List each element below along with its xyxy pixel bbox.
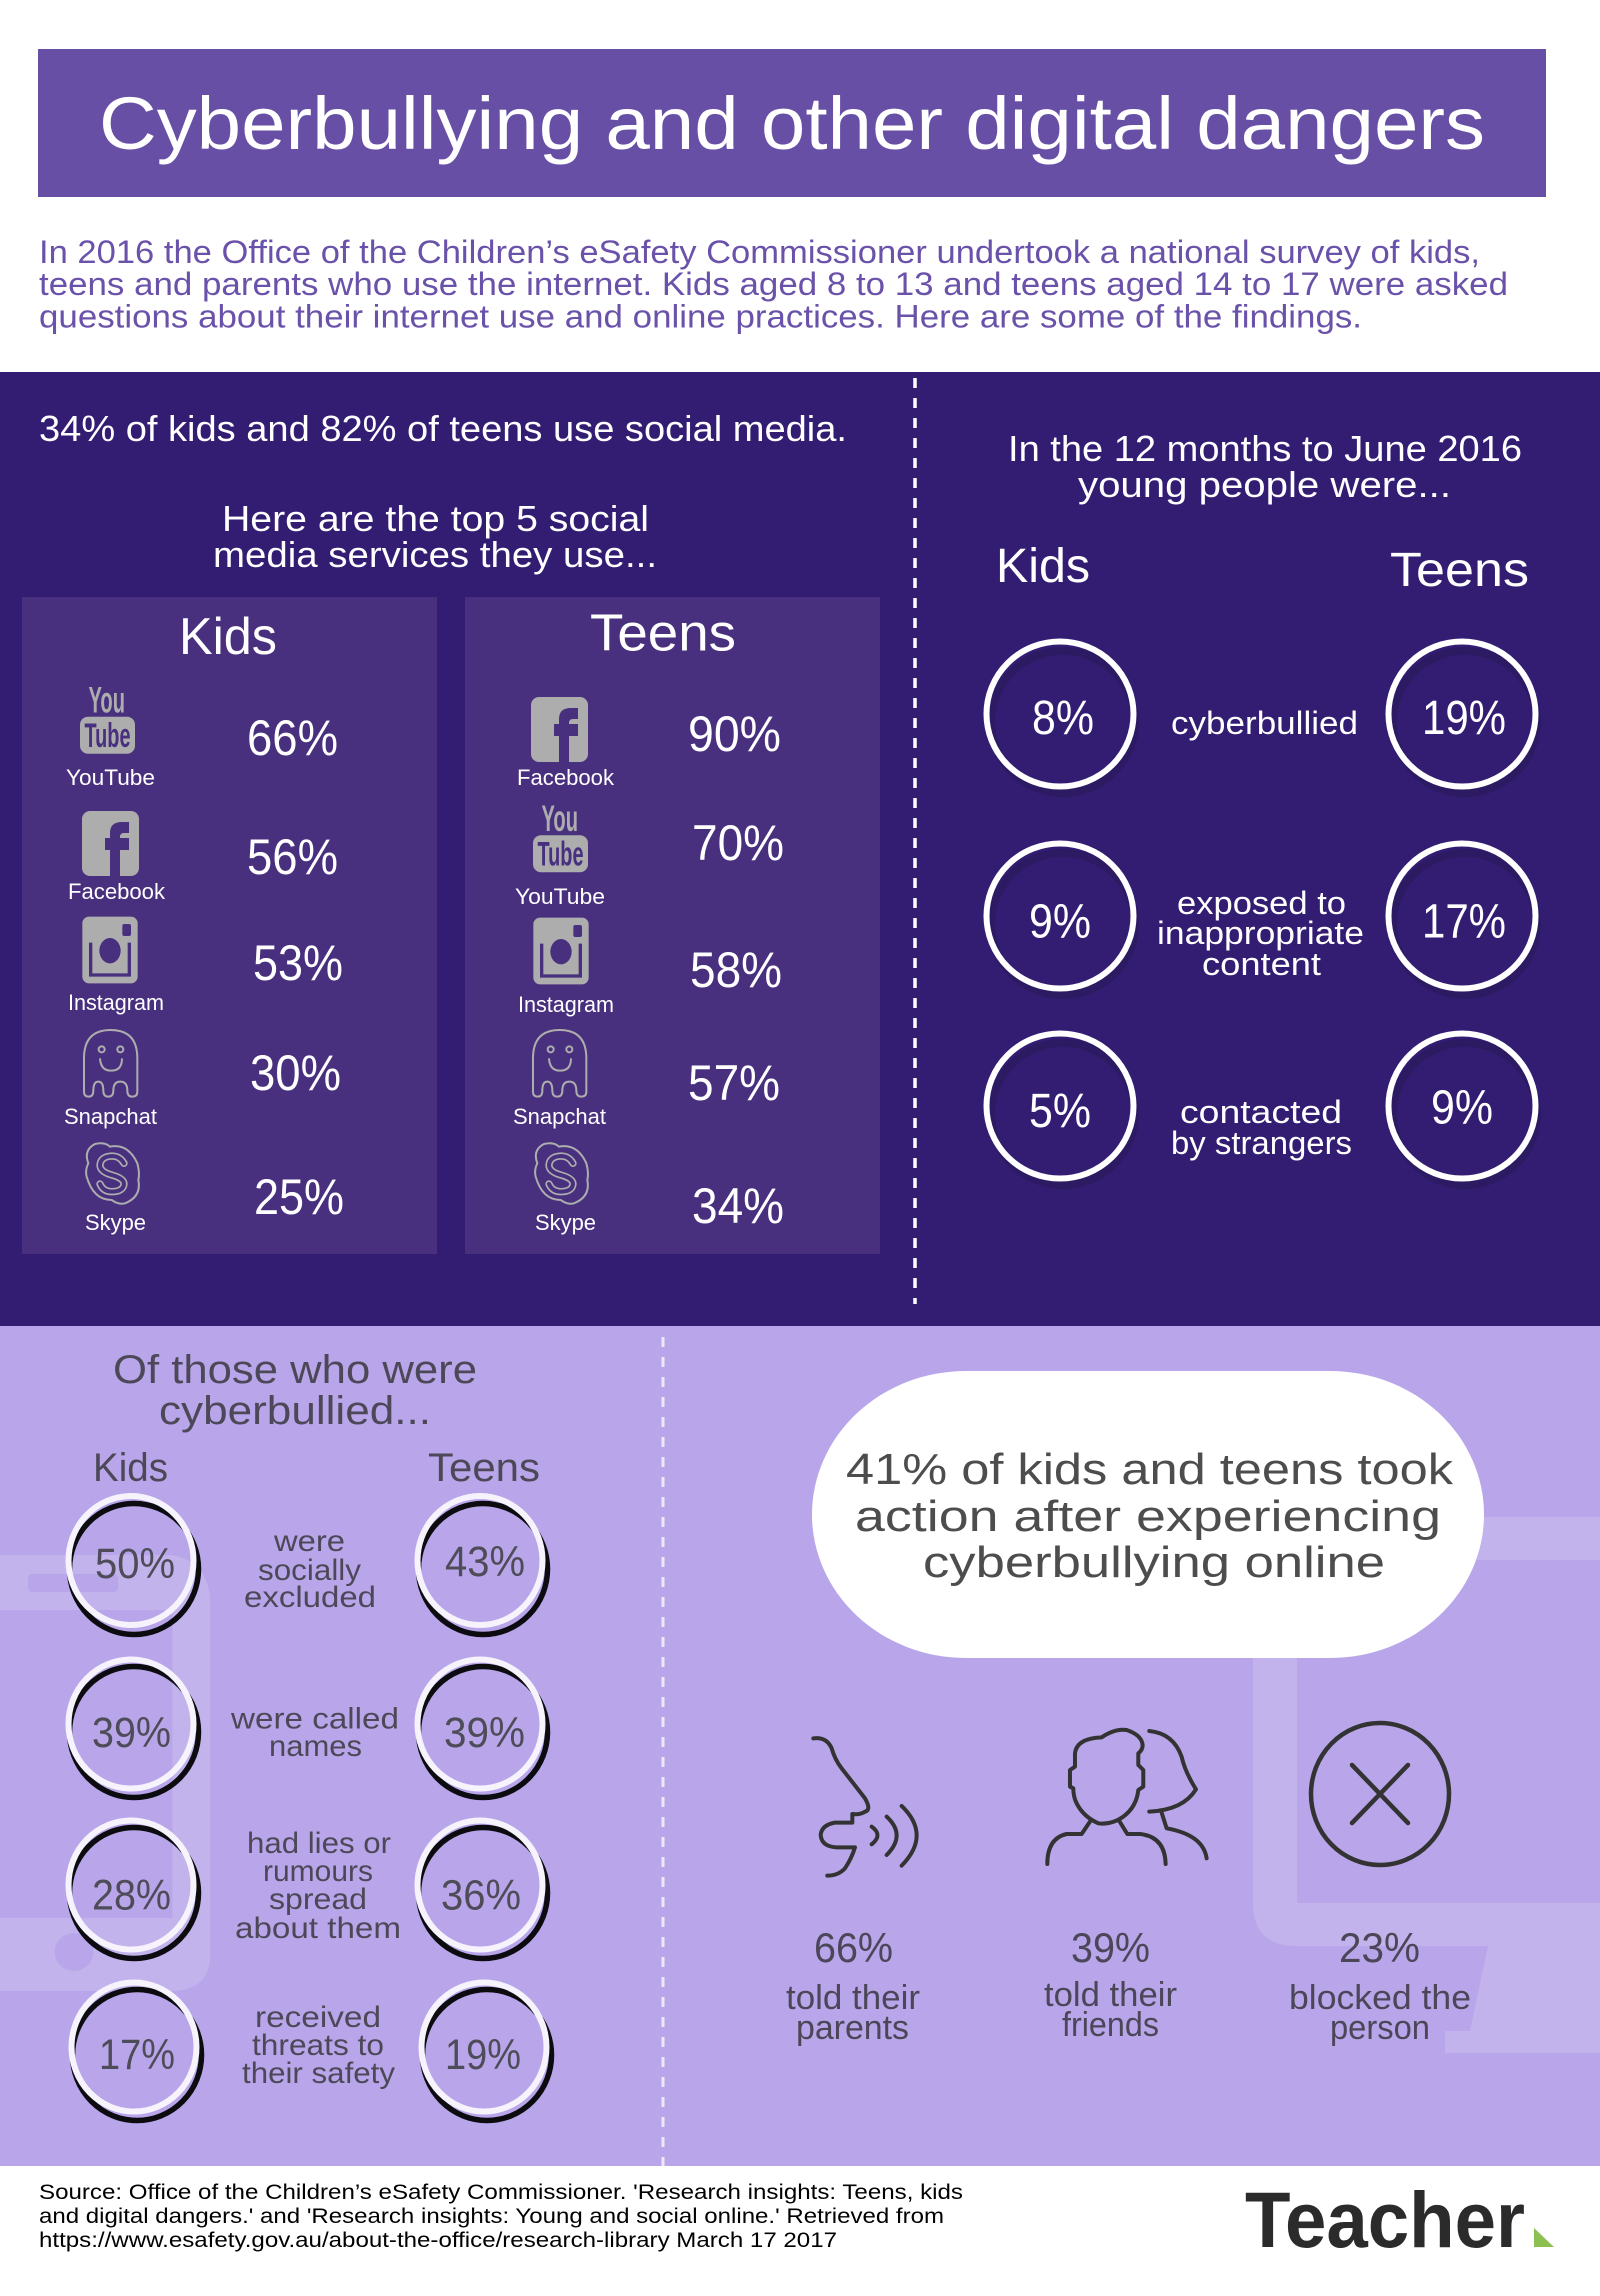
ring: kids socially excluded 50%: 50% bbox=[95, 1540, 175, 1588]
panel: lavender cyberbullied section bbox=[0, 1326, 1600, 2166]
callout bubble: 41% took action: 41% of kids and teens took bbox=[846, 1445, 1454, 1494]
panel: kids top services bbox=[22, 597, 437, 1254]
background icon: computer monitor bbox=[1253, 1517, 1600, 2053]
ring: teens threats 19% bbox=[422, 1982, 552, 2120]
label: Snapchat: Snapchat bbox=[64, 1104, 157, 1129]
ring label: socially excluded: excluded bbox=[244, 1581, 376, 1614]
ring: teens rumours 36% bbox=[418, 1820, 548, 1958]
label: Snapchat: Snapchat bbox=[513, 1104, 606, 1129]
icon: YouTube: You bbox=[88, 680, 125, 721]
ring label: socially excluded bbox=[244, 1525, 376, 1614]
stat circle: teens inappropriate content 17% bbox=[1388, 844, 1537, 995]
value: Snapchat kids: 30% bbox=[250, 1045, 341, 1101]
column heading: kids: Kids bbox=[996, 540, 1090, 593]
ring label: called names: were called bbox=[230, 1702, 399, 1736]
icon: YouTube: Tube bbox=[84, 717, 130, 755]
panel: dark social media and exposure section bbox=[0, 372, 1600, 1326]
label: Instagram: Instagram bbox=[68, 990, 164, 1015]
top 5 heading: Here are the top 5 social bbox=[222, 498, 649, 539]
label: Skype: Skype bbox=[85, 1210, 146, 1235]
ring: kids threats 17% bbox=[72, 1982, 202, 2120]
intro paragraph bbox=[39, 234, 1508, 334]
ring label: threats to safety bbox=[242, 2001, 395, 2090]
column heading: kids: Kids bbox=[93, 1446, 168, 1490]
value: Facebook kids: 56% bbox=[247, 829, 338, 885]
intro paragraph: teens and parents who use the internet. Kids aged 8 to 13 and teens aged 14 to 17 were asked bbox=[39, 266, 1508, 302]
ring label: called names: names bbox=[269, 1730, 362, 1763]
ring: kids called names 39%: 39% bbox=[92, 1709, 171, 1757]
label: Skype: Skype bbox=[535, 1210, 596, 1235]
value: YouTube teens: 70% bbox=[692, 815, 784, 871]
stat circle: teens contacted by strangers 9%: 9% bbox=[1431, 1082, 1493, 1134]
stat circle: kids inappropriate content 9%: 9% bbox=[1029, 896, 1091, 948]
stat label: cyberbullied: cyberbullied bbox=[1171, 705, 1358, 741]
icon: YouTube: You bbox=[542, 798, 578, 839]
value: Instagram teens: 58% bbox=[690, 942, 782, 998]
label: YouTube: YouTube bbox=[66, 765, 155, 790]
ring label: lies or rumours bbox=[235, 1827, 401, 1945]
ring label: called names bbox=[230, 1702, 399, 1763]
ring label: lies or rumours: had lies or bbox=[247, 1827, 391, 1860]
action stat: blocked person bbox=[1289, 1924, 1471, 2047]
stat label: exposed to inappropriate content: inappropriate bbox=[1157, 915, 1364, 951]
callout bubble: 41% took action: action after experiencing bbox=[855, 1492, 1441, 1541]
icon: Facebook bbox=[82, 811, 139, 876]
icon: YouTube: Tube bbox=[538, 836, 584, 874]
ring: kids rumours 28% bbox=[68, 1820, 198, 1958]
label: Instagram: Instagram bbox=[518, 992, 614, 1017]
action stat: blocked person: person bbox=[1330, 2009, 1430, 2047]
ring: teens threats 19%: 19% bbox=[445, 2031, 521, 2079]
stat circle: teens contacted by strangers 9% bbox=[1388, 1034, 1537, 1185]
value: Facebook teens: 90% bbox=[688, 706, 781, 762]
label: Facebook: Facebook bbox=[68, 879, 166, 904]
icon: Snapchat bbox=[533, 1030, 586, 1097]
heading: twelve months: young people were... bbox=[1078, 464, 1451, 505]
icon: YouTube bbox=[533, 798, 588, 874]
stat circle: kids contacted by strangers 5% bbox=[986, 1034, 1135, 1185]
background icon: phone bbox=[0, 1555, 210, 1991]
callout bubble: 41% took action bbox=[812, 1371, 1484, 1658]
icon: two people bbox=[1047, 1730, 1207, 1864]
stat circle: kids cyberbullied 8% bbox=[986, 642, 1135, 793]
stat label: exposed to inappropriate content bbox=[1157, 885, 1364, 982]
heading: of those cyberbullied bbox=[113, 1348, 477, 1433]
action stat: told parents: 66% bbox=[814, 1924, 893, 1971]
ring: kids socially excluded 50% bbox=[68, 1496, 198, 1634]
kids panel heading: Kids bbox=[179, 608, 277, 666]
teens panel heading: Teens bbox=[590, 604, 736, 662]
column heading: teens: Teens bbox=[1390, 544, 1529, 597]
source footer: https://www.esafety.gov.au/about-the-office/research-library March 17 2017 bbox=[39, 2229, 837, 2252]
icon: YouTube bbox=[80, 680, 135, 755]
ring label: lies or rumours: spread bbox=[269, 1883, 367, 1916]
stat label: exposed to inappropriate content: content bbox=[1202, 946, 1321, 982]
action stat: blocked person: blocked the bbox=[1289, 1979, 1471, 2017]
icon: Facebook bbox=[531, 697, 588, 762]
action stat: told parents: told their bbox=[786, 1979, 920, 2017]
stat label: contacted by strangers bbox=[1171, 1094, 1352, 1161]
ring: kids rumours 28%: 28% bbox=[92, 1872, 171, 1920]
ring: kids threats 17%: 17% bbox=[99, 2031, 175, 2079]
stat circle: teens cyberbullied 19% bbox=[1388, 642, 1537, 793]
title banner: Cyberbullying and other digital dangers bbox=[99, 82, 1485, 165]
top 5 heading bbox=[213, 498, 657, 575]
action stat: told friends bbox=[1044, 1924, 1177, 2044]
value: Skype kids: 25% bbox=[254, 1169, 344, 1225]
ring: teens socially excluded 43% bbox=[418, 1496, 548, 1634]
heading: twelve months bbox=[1008, 428, 1522, 505]
stat circle: teens inappropriate content 17%: 17% bbox=[1422, 896, 1506, 948]
stat label: contacted by strangers: contacted bbox=[1180, 1094, 1342, 1130]
source footer: and digital dangers.' and 'Research insights: Young and social online.' Retrieved from bbox=[39, 2205, 944, 2228]
ring: teens called names 39%: 39% bbox=[444, 1709, 525, 1757]
stat label: exposed to inappropriate content: exposed to bbox=[1177, 885, 1346, 921]
source footer bbox=[39, 2181, 963, 2252]
panel: teens top services bbox=[465, 597, 880, 1254]
action stat: told parents: parents bbox=[796, 2009, 909, 2047]
value: Instagram kids: 53% bbox=[253, 935, 343, 991]
heading: of those cyberbullied: cyberbullied... bbox=[159, 1389, 431, 1433]
icon: Instagram bbox=[82, 917, 138, 983]
action stat: told friends: 39% bbox=[1071, 1924, 1150, 1971]
icon: Snapchat bbox=[84, 1030, 137, 1097]
stat circle: kids contacted by strangers 5%: 5% bbox=[1029, 1085, 1091, 1138]
stat label: contacted by strangers: by strangers bbox=[1171, 1125, 1352, 1161]
heading: twelve months: In the 12 months to June 2016 bbox=[1008, 428, 1522, 469]
intro paragraph: questions about their internet use and online practices. Here are some of the findings. bbox=[39, 298, 1362, 334]
source footer: Source: Office of the Children’s eSafety Commissioner. 'Research insights: Teens, kids bbox=[39, 2181, 963, 2204]
ring label: threats to safety: received bbox=[255, 2001, 381, 2034]
value: Skype teens: 34% bbox=[692, 1178, 784, 1234]
ring: teens socially excluded 43%: 43% bbox=[445, 1538, 525, 1586]
ring label: threats to safety: threats to bbox=[252, 2029, 384, 2062]
ring: teens called names 39% bbox=[418, 1660, 548, 1798]
icon: Instagram bbox=[533, 918, 589, 984]
ring label: socially excluded: were bbox=[273, 1525, 345, 1558]
social media usage statement: 34% of kids and 82% of teens use social media. bbox=[39, 408, 847, 449]
value: Snapchat teens: 57% bbox=[688, 1055, 780, 1111]
label: YouTube: YouTube bbox=[515, 884, 605, 909]
top 5 heading: media services they use... bbox=[213, 534, 657, 575]
column heading: teens: Teens bbox=[428, 1446, 540, 1490]
icon: speaking face bbox=[813, 1738, 917, 1876]
ring label: lies or rumours: rumours bbox=[263, 1855, 373, 1888]
icon: Skype bbox=[535, 1143, 588, 1204]
label: Facebook: Facebook bbox=[517, 765, 615, 790]
title banner bbox=[38, 49, 1546, 197]
logo: Teacher: Teacher bbox=[1245, 2175, 1525, 2264]
callout bubble: 41% took action: cyberbullying online bbox=[923, 1538, 1385, 1587]
heading: of those cyberbullied: Of those who were bbox=[113, 1348, 477, 1392]
stat circle: kids cyberbullied 8%: 8% bbox=[1032, 692, 1094, 745]
ring label: lies or rumours: about them bbox=[235, 1912, 401, 1945]
action stat: told friends: friends bbox=[1062, 2006, 1159, 2044]
ring: kids called names 39% bbox=[68, 1660, 198, 1798]
ring label: threats to safety: their safety bbox=[242, 2057, 395, 2090]
ring: teens rumours 36%: 36% bbox=[441, 1872, 521, 1920]
ring label: socially excluded: socially bbox=[258, 1554, 361, 1587]
icon: blocked cross bbox=[1311, 1723, 1449, 1865]
stat circle: kids inappropriate content 9% bbox=[986, 844, 1135, 995]
value: YouTube kids: 66% bbox=[247, 710, 338, 766]
stat circle: teens cyberbullied 19%: 19% bbox=[1422, 692, 1506, 745]
action stat: told friends: told their bbox=[1044, 1976, 1177, 2014]
action stat: blocked person: 23% bbox=[1339, 1924, 1420, 1971]
intro paragraph: In 2016 the Office of the Children’s eSafety Commissioner undertook a national survey of kids, bbox=[39, 234, 1480, 270]
icon: Skype bbox=[86, 1143, 139, 1204]
action stat: told parents bbox=[786, 1924, 920, 2047]
